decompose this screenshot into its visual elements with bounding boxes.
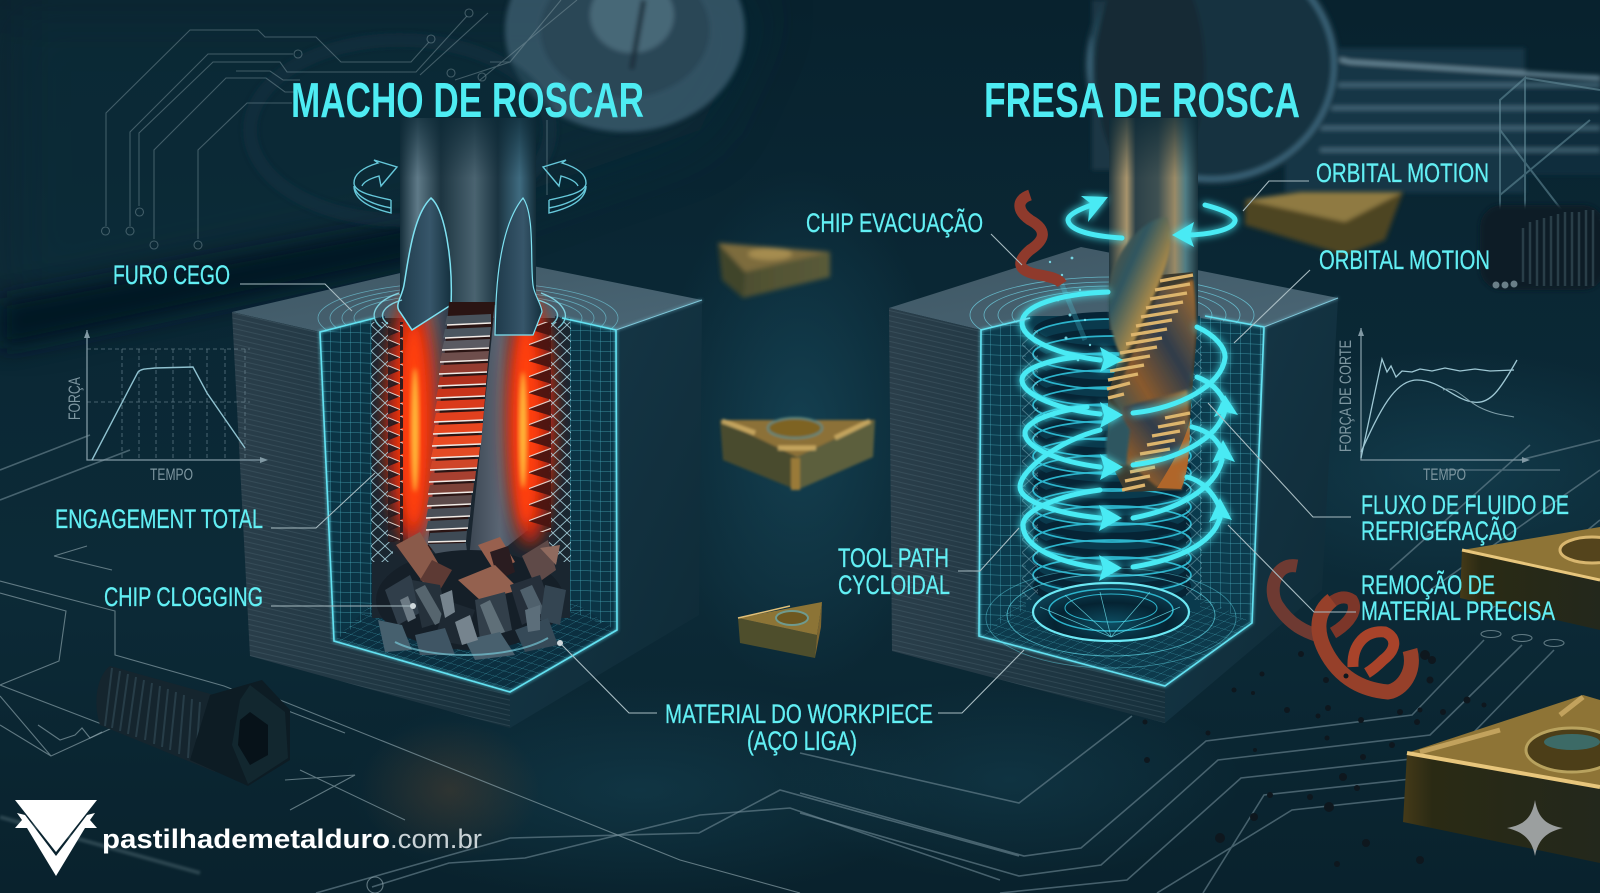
title: macho de roscar: MACHO DE ROSCAR [291, 74, 644, 128]
axis label: tempo right: TEMPO [1423, 465, 1466, 484]
icon: left rotation arrow [354, 160, 397, 213]
section walls [979, 318, 1264, 686]
label: engagement total [55, 473, 375, 534]
thread mill helical body [1106, 217, 1197, 492]
metal debris scatter [1142, 650, 1486, 867]
machine spindle left (background, blurred) [250, 0, 745, 220]
top rings around hole [318, 282, 618, 354]
label: orbital motion top [1243, 158, 1489, 211]
title: fresa de rosca: FRESA DE ROSCA [984, 74, 1300, 128]
label: orbital motion top: ORBITAL MOTION [1316, 158, 1489, 188]
section walls with grid [320, 316, 617, 692]
hex bolt bottom left [96, 666, 290, 786]
label: tool path cycloidal [838, 528, 1019, 600]
logo: pastilha de metal duro [15, 800, 482, 876]
logo mark [15, 800, 97, 876]
label: remoção de material: REMOÇÃO DE [1361, 569, 1495, 600]
insert: large gold triangle bottom right [1403, 695, 1600, 863]
thread lattice on hole walls [371, 322, 571, 562]
top rings [970, 277, 1254, 353]
label: material do workpiece: (AÇO LIGA) [747, 726, 857, 756]
insert: gold triangle right edge [1460, 527, 1600, 630]
label: engagement total: ENGAGEMENT TOTAL [55, 504, 263, 534]
insert: gold triangle lower centre [738, 602, 822, 658]
label: material do workpiece: MATERIAL DO WORKPIECE [665, 699, 933, 729]
chip clog pile [376, 532, 566, 660]
circuit traces bottom [316, 440, 1600, 893]
circuit traces lower left [0, 435, 800, 893]
label: orbital motion lower: ORBITAL MOTION [1319, 245, 1490, 275]
axis label: força de corte: FORÇA DE CORTE [1336, 340, 1355, 452]
panel: fresa de rosca block [889, 118, 1338, 723]
icon: right rotation arrow [543, 160, 586, 213]
helical tool path arrows [1020, 292, 1238, 581]
section outline [979, 298, 1338, 686]
logo: pastilha de metal duro: .com.br [390, 824, 482, 854]
label: chip evacuação [806, 207, 1022, 265]
label: fluxo de fluido [1208, 403, 1569, 546]
label: chip clogging: CHIP CLOGGING [104, 582, 263, 612]
tap flutes [398, 198, 542, 335]
section outline [320, 300, 702, 692]
insert: blurred gold triangle top right [1245, 192, 1403, 255]
circuit traces top left [102, 0, 577, 249]
hole interior and heat [372, 295, 570, 618]
orbital motion arrows [1068, 196, 1235, 247]
label: remoção de material [1228, 525, 1555, 626]
panel: macho de roscar block [232, 118, 702, 728]
block faces [889, 247, 1338, 723]
copper chip spiral [1273, 566, 1411, 692]
chart: cutting force over time (right) [1336, 328, 1530, 463]
insert: gold triangle centre [720, 418, 875, 490]
machine spindle right and arm (background, blurred) [1084, 0, 1600, 193]
axis label: força: FORÇA [65, 377, 84, 420]
rim rings at hole mouth [374, 293, 565, 328]
label: material do workpiece [557, 640, 1024, 756]
coolant spray sparks [1049, 257, 1091, 361]
wireframe scaffold and coil (right background) [1480, 78, 1600, 290]
threaded hole with helical rings [986, 315, 1236, 668]
insert: blurred gold triangle top centre [718, 243, 830, 298]
label: chip evacuação: CHIP EVACUAÇÃO [806, 207, 983, 238]
label: orbital motion lower [1234, 245, 1490, 343]
label: tool path cycloidal: TOOL PATH [838, 543, 949, 573]
copper chip small (chip evacuation) [1020, 195, 1062, 284]
label: furo cego: FURO CEGO [113, 260, 230, 290]
label: fluxo de fluido: REFRIGERAÇÃO [1361, 515, 1517, 546]
chart: force over time (left) [65, 330, 268, 463]
label: tool path cycloidal: CYCLOIDAL [838, 570, 950, 600]
tap shank [400, 118, 536, 305]
icon: sparkle watermark [1507, 800, 1563, 856]
thread mill shank [1109, 118, 1198, 330]
tap threaded core [426, 302, 495, 578]
label: chip clogging [104, 582, 416, 612]
logo text: pastilhademetalduro [102, 824, 390, 854]
block faces [232, 255, 702, 728]
label: furo cego [113, 260, 352, 311]
axis label: tempo left: TEMPO [150, 465, 193, 484]
